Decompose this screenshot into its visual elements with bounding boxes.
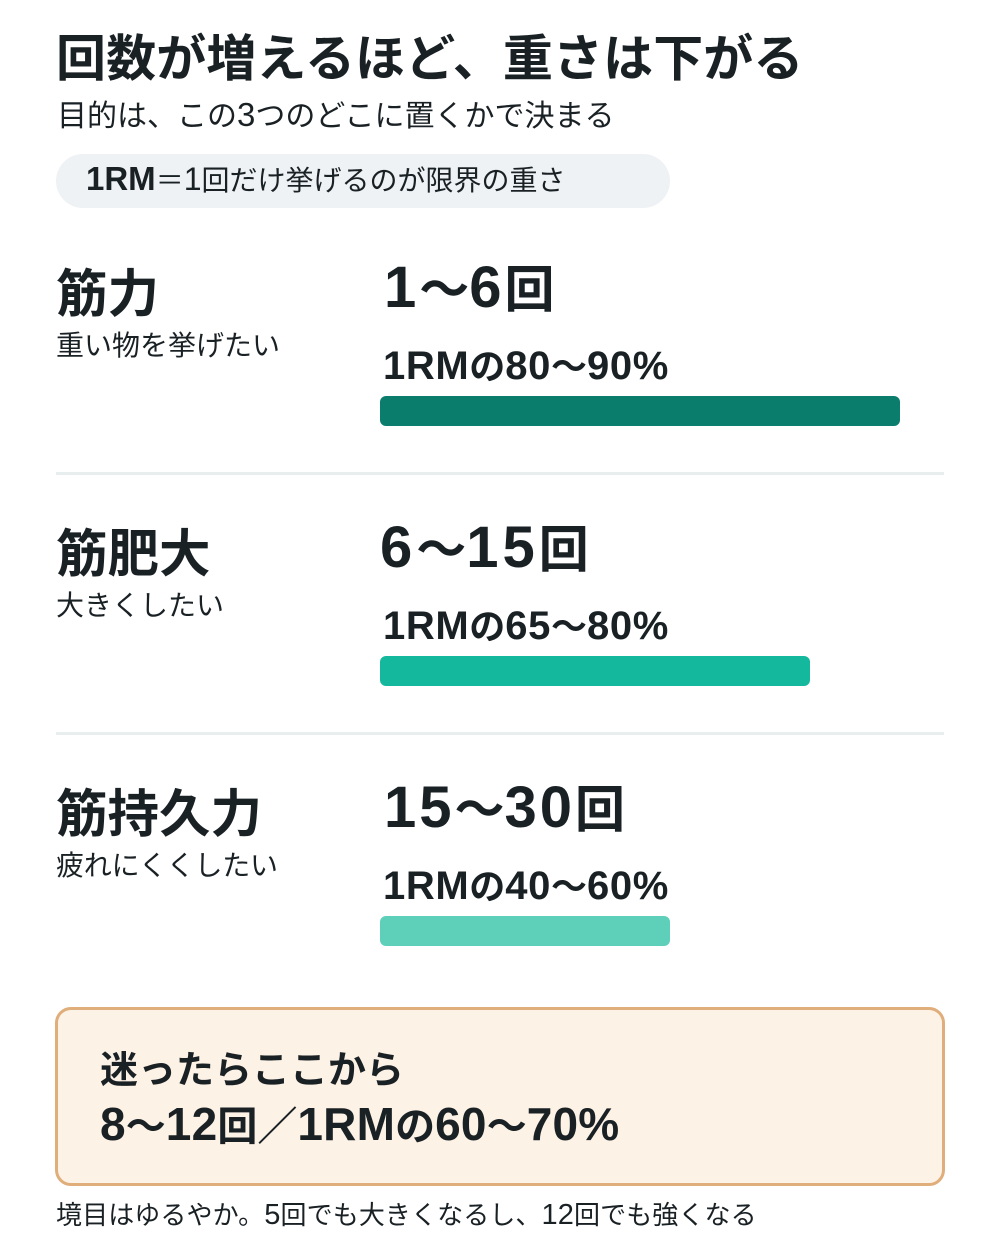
callout lead: 迷ったらここから	[100, 1050, 404, 1092]
definition pill	[56, 154, 670, 208]
title: 回数が増えるほど、重さは下がる	[56, 31, 804, 87]
definition text: 1RM＝1回だけ挙げるのが限界の重さ	[86, 160, 566, 197]
hypertrophy load: 1RMの65～80%	[383, 604, 669, 648]
strength load: 1RMの80～90%	[383, 344, 669, 388]
endurance bar	[380, 916, 670, 946]
subtitle: 目的は、この3つのどこに置くかで決まる	[57, 96, 614, 133]
row: strength	[56, 255, 900, 426]
row: endurance	[56, 775, 670, 946]
endurance reps: 15～30回	[384, 775, 625, 840]
row: hypertrophy	[56, 515, 810, 686]
endurance load: 1RMの40～60%	[383, 864, 669, 908]
footnote: 境目はゆるやか。5回でも大きくなるし、12回でも強くなる	[56, 1199, 757, 1231]
strength reps: 1～6回	[384, 255, 555, 320]
endurance heading: 筋持久力	[56, 785, 262, 843]
hypertrophy bar	[380, 656, 810, 686]
strength goal: 重い物を挙げたい	[56, 330, 280, 361]
endurance goal: 疲れにくくしたい	[56, 850, 278, 881]
callout	[55, 1007, 945, 1186]
strength heading: 筋力	[56, 265, 159, 323]
strength bar	[380, 396, 900, 426]
hypertrophy goal: 大きくしたい	[56, 590, 224, 621]
hypertrophy heading: 筋肥大	[56, 525, 211, 583]
callout recommendation: 8～12回／1RMの60～70%	[100, 1098, 619, 1150]
hypertrophy reps: 6～15回	[380, 515, 589, 580]
